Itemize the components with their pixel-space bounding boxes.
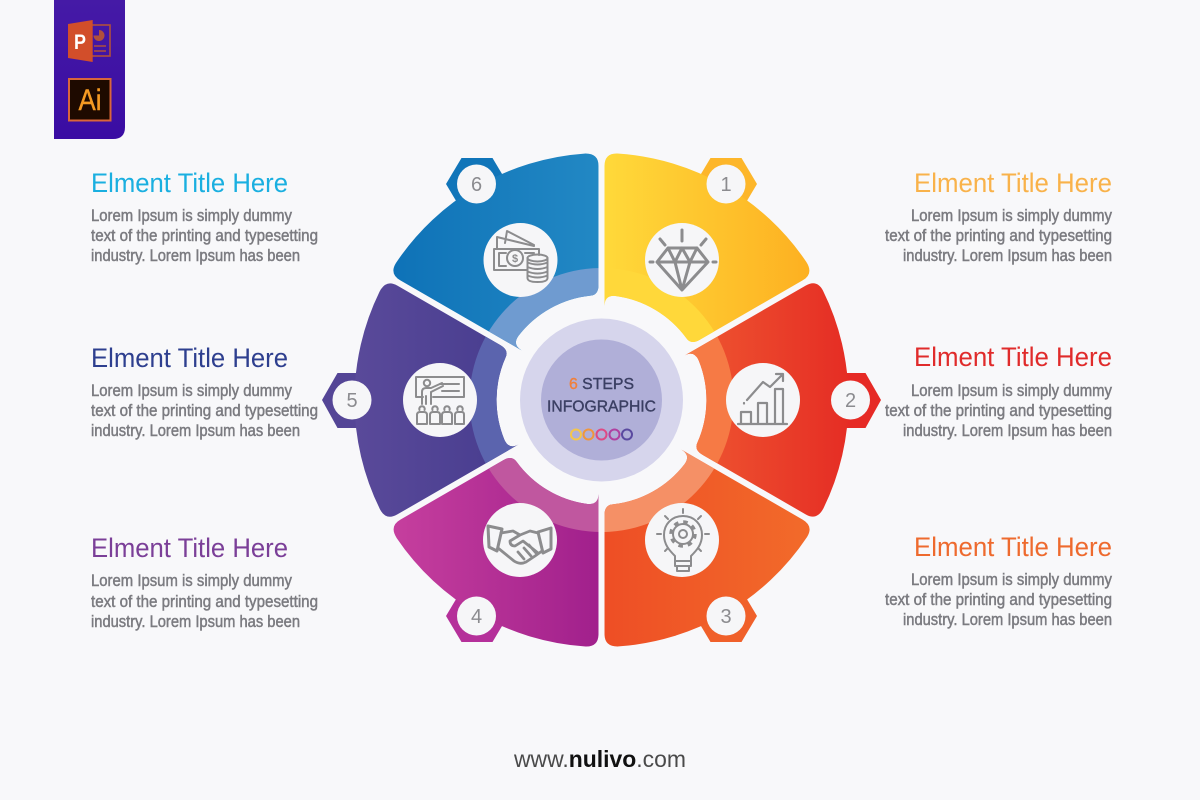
text block 6: industry. Lorem Ipsum has been xyxy=(91,246,300,265)
text block 3: Lorem Ipsum is simply dummy xyxy=(911,570,1112,589)
segment 1 yellow xyxy=(604,153,809,342)
number badge 6: 6 xyxy=(471,174,482,196)
text block 1: text of the printing and typesetting xyxy=(885,226,1112,245)
number badge 6 xyxy=(457,164,496,204)
text block 5: industry. Lorem Ipsum has been xyxy=(91,421,300,440)
number badge 1 xyxy=(706,164,746,204)
text block 5: Lorem Ipsum is simply dummy xyxy=(91,381,292,400)
text block 5: Elment Title Here xyxy=(91,343,288,373)
text block 5: text of the printing and typesetting xyxy=(91,401,318,420)
text block 4: Elment Title Here xyxy=(91,533,288,563)
icon: diamond xyxy=(645,223,719,297)
text block 5 xyxy=(91,343,318,440)
segment 5 indigo xyxy=(322,283,518,517)
text block 6: Lorem Ipsum is simply dummy xyxy=(91,206,292,225)
text block 3: industry. Lorem Ipsum has been xyxy=(903,610,1112,629)
icon: PowerPoint: P xyxy=(74,31,86,54)
text block 2: industry. Lorem Ipsum has been xyxy=(903,421,1112,440)
number badge 5 xyxy=(332,380,372,420)
number badge 3 xyxy=(706,596,746,636)
text block 2: Lorem Ipsum is simply dummy xyxy=(911,381,1112,400)
icon: money and coins: $ xyxy=(512,253,518,265)
center hub xyxy=(520,318,683,482)
text block 1: Lorem Ipsum is simply dummy xyxy=(911,206,1112,225)
hub subtitle: INFOGRAPHIC xyxy=(547,398,656,416)
text block 4 xyxy=(91,533,318,631)
text block 4: industry. Lorem Ipsum has been xyxy=(91,612,300,631)
number badge 3: 3 xyxy=(720,606,732,628)
text block 2: Elment Title Here xyxy=(914,342,1112,372)
number badge 4: 4 xyxy=(471,606,482,628)
text block 4: Lorem Ipsum is simply dummy xyxy=(91,571,292,590)
text block 1 xyxy=(885,168,1112,265)
text block 6: text of the printing and typesetting xyxy=(91,226,318,245)
icon: Illustrator: Ai xyxy=(78,84,102,117)
number badge 1: 1 xyxy=(720,174,732,196)
text block 6: Elment Title Here xyxy=(91,168,288,198)
software badge panel xyxy=(54,0,125,139)
segment 6 blue xyxy=(393,154,598,350)
icon: light bulb gear xyxy=(645,503,719,577)
text block 3: Elment Title Here xyxy=(914,532,1112,562)
number badge 4 xyxy=(457,596,496,636)
wheel: six segments xyxy=(322,154,881,646)
text block 2 xyxy=(885,342,1112,440)
segment 3 orange xyxy=(604,450,810,646)
number badge 2: 2 xyxy=(845,390,856,412)
icon: handshake xyxy=(483,503,557,577)
text block 2: text of the printing and typesetting xyxy=(885,401,1112,420)
icon: money and coins xyxy=(484,223,558,297)
icon: growth chart xyxy=(726,363,800,437)
hub colour rings xyxy=(571,430,632,440)
number badge 5: 5 xyxy=(346,390,358,412)
hub title: 6 STEPS xyxy=(569,376,634,393)
text block 3: text of the printing and typesetting xyxy=(885,590,1112,609)
segment 2 red xyxy=(685,283,881,517)
text block 4: text of the printing and typesetting xyxy=(91,592,318,611)
text block 6 xyxy=(91,168,318,265)
footer url: www.nulivo.com xyxy=(513,746,686,772)
text block 3 xyxy=(885,532,1112,629)
icon: presenter and audience xyxy=(403,363,477,437)
segment 4 magenta xyxy=(394,458,598,647)
text block 1: industry. Lorem Ipsum has been xyxy=(903,246,1112,265)
number badge 2 xyxy=(831,380,870,420)
text block 1: Elment Title Here xyxy=(914,168,1112,198)
